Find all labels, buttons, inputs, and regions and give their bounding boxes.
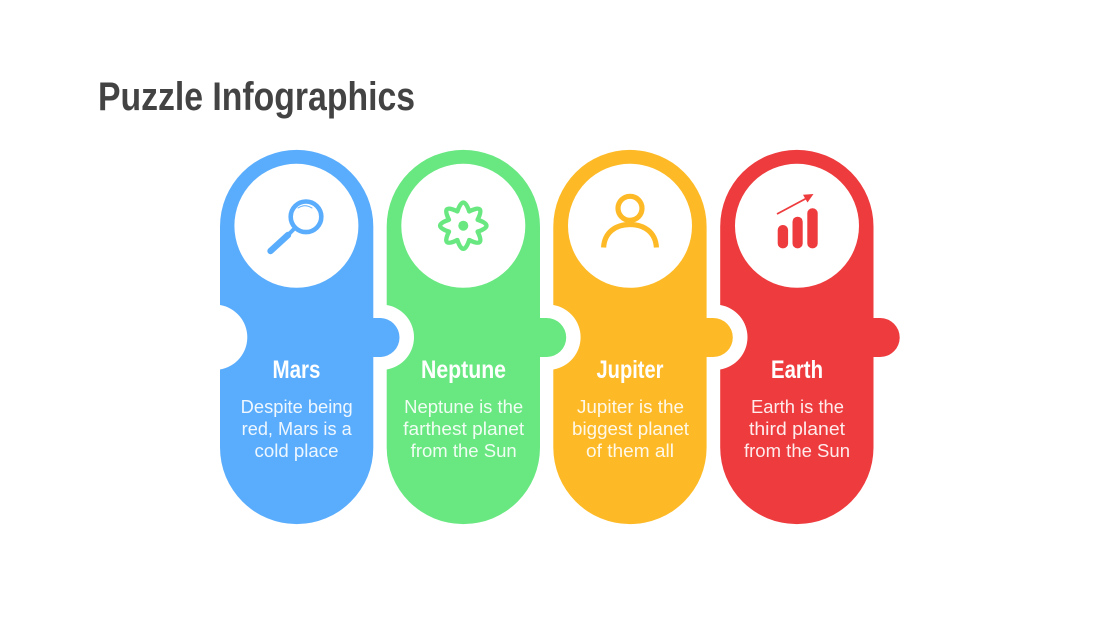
text: Mars description: cold place xyxy=(254,441,338,461)
text: Mars description: red, Mars is a xyxy=(242,419,353,439)
heading: Mars: Mars xyxy=(272,356,320,384)
title: Puzzle Infographics xyxy=(98,75,415,119)
text: Neptune description xyxy=(403,397,524,461)
icon circle xyxy=(401,164,525,288)
icon circle xyxy=(234,164,358,288)
heading: Jupiter: Jupiter xyxy=(596,356,664,384)
text: Earth description: third planet xyxy=(749,419,845,439)
heading: Earth: Earth xyxy=(771,356,823,384)
text: Neptune description: Neptune is the xyxy=(404,397,523,417)
panel: Neptune xyxy=(387,150,566,524)
icon circle xyxy=(568,164,692,288)
puzzle piece: green xyxy=(387,150,566,524)
panel: Mars xyxy=(220,150,400,524)
icon: magnifying glass xyxy=(270,202,321,251)
text: Jupiter description: Jupiter is the xyxy=(577,397,684,417)
heading: Neptune: Neptune xyxy=(421,356,506,384)
text: Neptune description: from the Sun xyxy=(411,441,517,461)
icon: person xyxy=(604,196,656,248)
puzzle piece: yellow xyxy=(553,150,733,524)
text: Mars description xyxy=(241,397,353,461)
text: Earth description: Earth is the xyxy=(751,397,844,417)
puzzle piece: red xyxy=(720,150,900,524)
puzzle piece: blue xyxy=(220,150,400,524)
icon circle xyxy=(735,164,859,288)
text: Earth description: from the Sun xyxy=(744,441,850,461)
text: Jupiter description: biggest planet xyxy=(572,419,689,439)
text: Jupiter description: of them all xyxy=(586,441,674,461)
text: Mars description: Despite being xyxy=(241,397,353,417)
text: Earth description xyxy=(744,397,850,461)
text: Neptune description: farthest planet xyxy=(403,419,524,439)
panel: Earth xyxy=(720,150,900,524)
text: Jupiter description xyxy=(572,397,689,461)
icon: gear xyxy=(440,203,486,249)
icon: rising bar chart xyxy=(777,194,818,248)
panel: Jupiter xyxy=(553,150,733,524)
